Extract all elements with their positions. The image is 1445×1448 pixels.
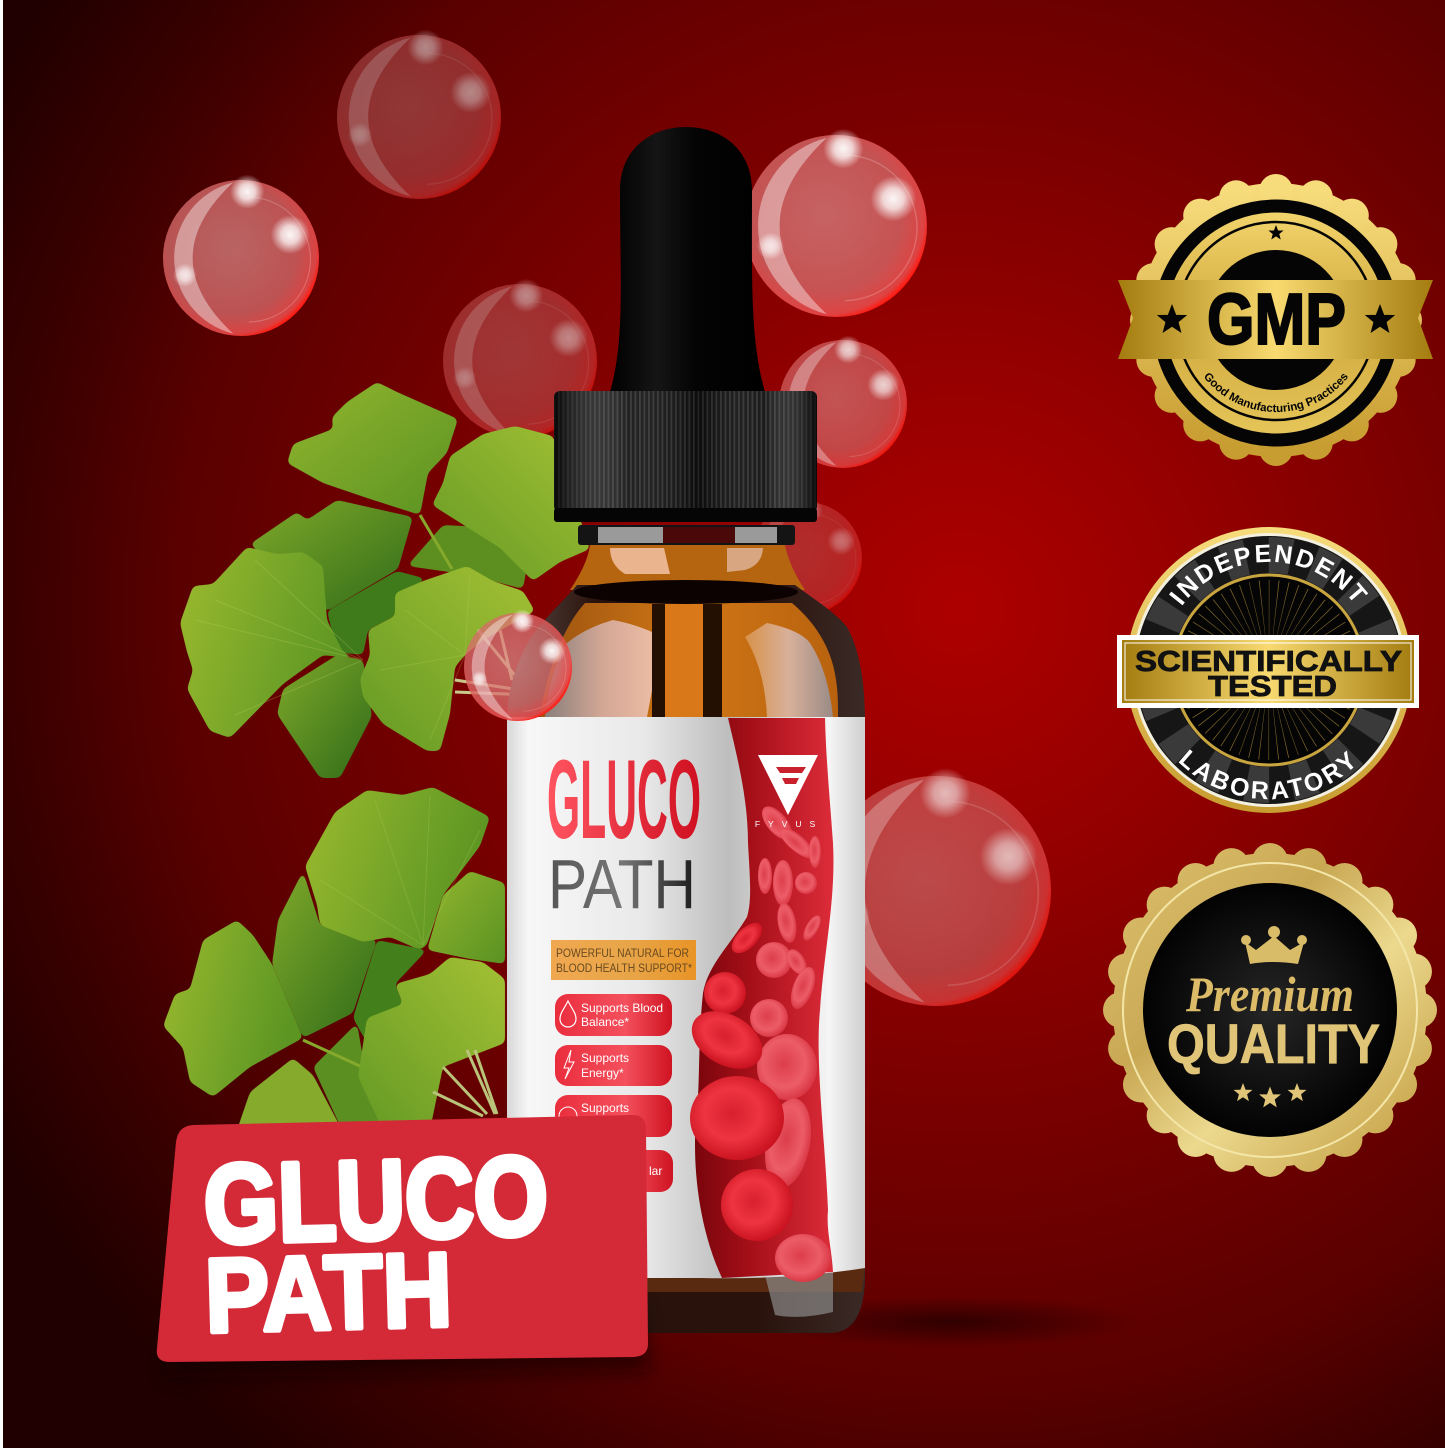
dropper tube centre	[665, 604, 703, 717]
inner gold ring	[1174, 575, 1364, 765]
leaf: front right	[360, 566, 535, 751]
cap	[554, 391, 817, 512]
base reflection	[765, 1270, 833, 1317]
tag shadow	[165, 1300, 650, 1378]
white ring	[1132, 533, 1406, 807]
leaf: bottom left	[237, 1058, 342, 1130]
crown	[1241, 926, 1307, 964]
leaf: bottom middle	[313, 1023, 383, 1130]
dropper bottle: GLUCO	[547, 737, 701, 862]
leaf: top	[287, 382, 458, 515]
orange claim box	[551, 940, 696, 980]
bubble: top left	[163, 175, 319, 336]
leaf: middle dark	[327, 571, 427, 655]
ribbon stars	[1157, 304, 1395, 333]
leaf stems: lower bunch	[433, 1050, 497, 1116]
bubble: behind cap left	[443, 279, 597, 438]
arc caption: Good Manufacturing Practices	[1205, 373, 1348, 412]
tag card	[157, 1115, 648, 1362]
label base	[507, 717, 865, 1278]
banner inner line	[1125, 643, 1411, 700]
benefit pill: blood balance: Supports Blood	[581, 1001, 663, 1015]
banner text 2: TESTED	[1208, 671, 1337, 703]
GMP wordmark: GMP	[1207, 280, 1346, 360]
badge: GMP	[1118, 174, 1433, 466]
leaf veins: front right	[380, 575, 470, 740]
banner text 1: SCIENTIFICALLY	[1135, 646, 1402, 678]
bubble: behind shoulder	[750, 498, 862, 614]
red tag	[157, 1115, 650, 1378]
amber interior	[540, 603, 838, 717]
benefit pill: energy: Supports	[581, 1051, 629, 1065]
banner	[1117, 635, 1419, 708]
benefit pill: blood balance	[555, 994, 672, 1036]
bubble: right of cap	[779, 336, 907, 468]
leaf stem: left	[303, 1040, 362, 1067]
leaf: back left	[250, 500, 413, 611]
thin gold ring	[1123, 863, 1417, 1157]
thin inner ring	[1177, 222, 1375, 420]
glass outer dark	[507, 585, 865, 1333]
blood cells	[682, 801, 831, 1282]
leaf: top	[305, 787, 490, 950]
orange claim box: BLOOD HEALTH SUPPORT*	[556, 963, 692, 975]
leaf: middle dark	[353, 940, 427, 1043]
brand logo: FYVUS	[755, 819, 823, 829]
leaf: right behind	[427, 871, 505, 964]
base brown band	[507, 1265, 865, 1292]
leaf: large left	[163, 920, 303, 1097]
brand logo	[755, 755, 823, 829]
leaf stem: top	[420, 515, 452, 569]
cap lower band	[554, 508, 817, 522]
neck amber	[570, 545, 805, 590]
pipette bulb	[610, 127, 765, 392]
upper ginkgo leaves	[180, 382, 590, 778]
seal scallops	[1139, 183, 1413, 457]
benefit pill: supports: Supports	[581, 1101, 629, 1115]
lower ginkgo leaves	[163, 787, 505, 1130]
bubble: front of bottle shoulder	[464, 609, 572, 721]
QUALITY: QUALITY	[1167, 1012, 1380, 1075]
seal scallops	[1113, 853, 1427, 1167]
banner gold	[1122, 640, 1414, 703]
neck highlights	[610, 548, 763, 574]
bottom arc text: LABORATORY	[1178, 749, 1354, 800]
inner black disc	[1206, 250, 1346, 390]
bubble: upper right of dropper	[745, 129, 927, 317]
top star	[1268, 225, 1284, 239]
right reflection	[745, 623, 833, 717]
dropper bottle	[507, 127, 865, 1333]
label title: PATH: PATH	[548, 845, 696, 923]
black outer ring	[1159, 206, 1393, 440]
cap shading	[554, 391, 817, 512]
benefit pill: blood balance: Balance*	[581, 1015, 629, 1029]
badge: scientifically tested	[1117, 527, 1419, 813]
dark shoulder ring	[574, 580, 798, 604]
Premium script: Premium	[1185, 966, 1354, 1022]
floor shadow	[760, 1296, 1140, 1348]
dark ring	[1135, 536, 1403, 804]
benefit pill: supports	[555, 1095, 672, 1137]
leaf: back left	[272, 871, 377, 1038]
red swoosh	[695, 718, 833, 1278]
orange claim box: POWERFUL NATURAL FOR	[556, 948, 689, 960]
top arc text: INDEPENDENT	[1169, 544, 1368, 606]
leaf: under left	[277, 655, 372, 778]
collar windows	[598, 527, 777, 543]
bubble: top centre	[337, 29, 501, 199]
leaf veins: top	[320, 795, 480, 945]
grey wedges	[1154, 555, 1384, 785]
gold outer ring	[1126, 527, 1412, 813]
benefit pill: cardiovascular	[555, 1150, 673, 1192]
leaf: front right	[358, 957, 505, 1130]
bubble: large right of bottle	[821, 768, 1051, 1006]
tag title: PATH: PATH	[204, 1232, 454, 1355]
collar	[578, 525, 795, 545]
left reflection	[545, 620, 662, 717]
benefit pill: cardiovascular: lar	[649, 1164, 662, 1178]
leaf: right top	[432, 426, 590, 581]
black disc	[1143, 883, 1397, 1137]
badge: premium quality	[1113, 853, 1427, 1167]
dropper tube lines	[652, 604, 722, 717]
leaf: large left	[180, 547, 363, 738]
tag title: GLUCO: GLUCO	[202, 1133, 550, 1267]
sun rays	[1215, 616, 1323, 724]
leaf veins: large left	[195, 560, 363, 715]
ribbon	[1118, 280, 1433, 359]
leaf stems: upper bunch	[455, 630, 530, 695]
leaf: back stem leaf	[407, 525, 527, 589]
benefit pill: energy: Energy*	[581, 1066, 624, 1080]
benefit pill: energy	[555, 1045, 672, 1086]
stars	[1234, 1083, 1306, 1107]
